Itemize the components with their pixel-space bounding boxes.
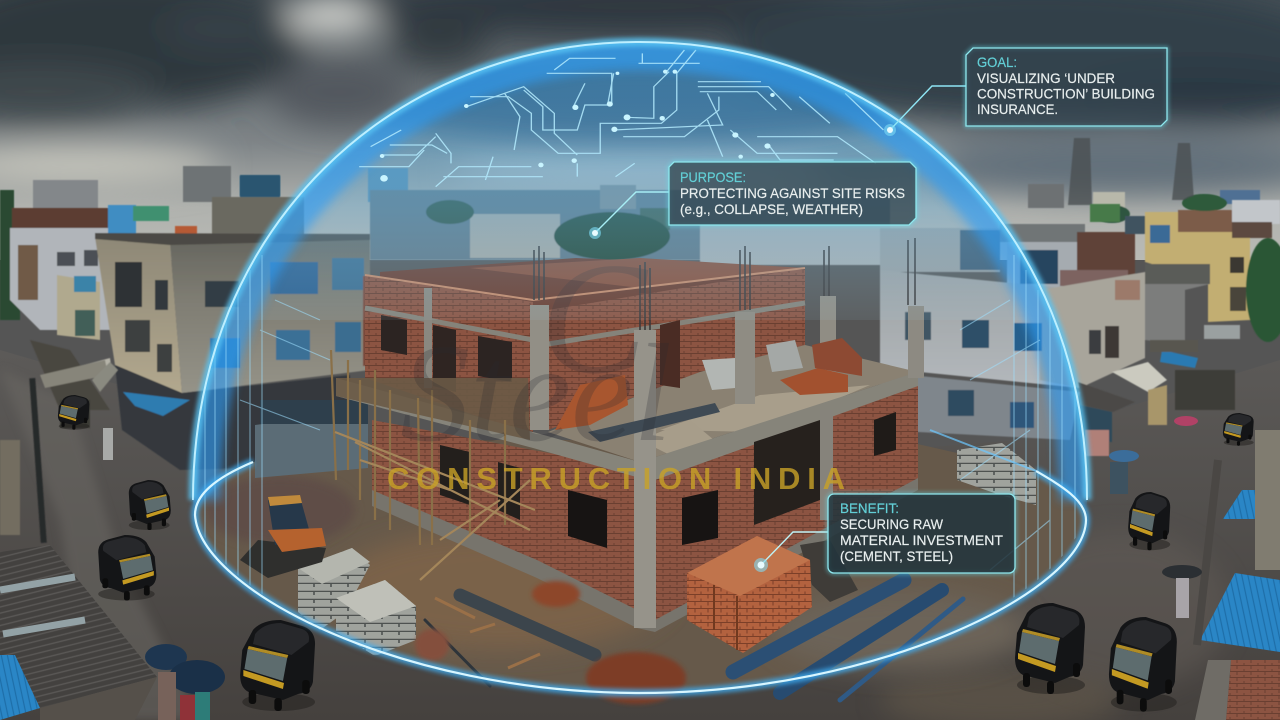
- dark stacked timber by bricks: [800, 540, 858, 602]
- bright wall near rim: [193, 42, 1087, 500]
- site materials: [240, 443, 1036, 704]
- goal text: CONSTRUCTION’ BUILDING: [977, 86, 1155, 102]
- scaffolding boards: [336, 378, 530, 440]
- protective glass dome: [193, 40, 1087, 693]
- windows under the dome: [270, 262, 318, 294]
- foundation plinth: [372, 478, 918, 632]
- terrace slab: [548, 345, 918, 462]
- pedestrians: [180, 695, 195, 720]
- leader line: benefit: [761, 532, 828, 565]
- purpose panel: [669, 162, 916, 225]
- goal panel: [966, 48, 1167, 126]
- utility pole right: [1197, 460, 1218, 645]
- grey right face of corner block: [170, 238, 370, 393]
- rebar spikes: [534, 238, 915, 330]
- benefit panel: [828, 494, 1015, 573]
- dome base ring: [195, 462, 1086, 693]
- stacked orange bricks: [687, 536, 812, 653]
- trees at right edge: [1246, 238, 1280, 342]
- upper storey right brick face: [548, 268, 805, 430]
- benefit text: MATERIAL INVESTMENT: [840, 532, 1003, 548]
- left street buildings: [0, 175, 373, 543]
- purpose text: PURPOSE:: [680, 169, 746, 185]
- cloud band seen through dome: [399, 63, 880, 158]
- benefit text: (CEMENT, STEEL): [840, 548, 953, 564]
- upper storey left brick face: [365, 275, 533, 435]
- benefit text: BENEFIT:: [840, 500, 899, 516]
- excavator: [240, 495, 326, 578]
- purpose text: PROTECTING AGAINST SITE RISKS: [680, 185, 905, 201]
- purpose panel glow: [669, 162, 916, 225]
- blue roof right: [1200, 573, 1280, 652]
- callout: purpose: [589, 162, 916, 239]
- watermark: script lettering: C: [540, 229, 649, 407]
- utility pole: [29, 378, 47, 543]
- callout: goal: [884, 48, 1167, 136]
- corrugated roof: [0, 545, 157, 720]
- anchor dot: benefit: [754, 558, 768, 572]
- watermark: script lettering: Steel: [400, 316, 672, 471]
- red soil pile: [586, 652, 686, 704]
- white main building upper: [880, 270, 1080, 388]
- sky background with storm clouds: [0, 0, 1280, 260]
- right street buildings: [880, 195, 1280, 456]
- purpose text: (e.g., COLLAPSE, WEATHER): [680, 201, 863, 217]
- front left cement bags: [298, 548, 370, 630]
- purpose text: [680, 169, 905, 217]
- window openings: [381, 315, 407, 355]
- steel rebar bundles: [425, 580, 963, 700]
- callout: benefit: [754, 494, 1015, 573]
- leader line: goal: [890, 86, 966, 130]
- ground and roads: [0, 350, 1280, 720]
- right cement bag stack: [957, 443, 1036, 505]
- benefit text: SECURING RAW: [840, 516, 944, 532]
- goal text: GOAL:: [977, 54, 1017, 70]
- benefit panel glow: [828, 494, 1015, 573]
- anchor dot: purpose: [589, 227, 601, 239]
- dome rim glow: [193, 42, 1087, 500]
- terrace materials: [555, 375, 628, 430]
- white main building lower: [880, 372, 1080, 440]
- goal text: VISUALIZING ‘UNDER: [977, 70, 1115, 86]
- back walls of upper storey: [380, 258, 805, 360]
- telecom towers: [1068, 138, 1092, 205]
- goal text: INSURANCE.: [977, 101, 1058, 117]
- tan left face of corner block: [95, 237, 182, 393]
- grey mid building: [1145, 265, 1210, 345]
- blue corrugated roof: [0, 655, 40, 720]
- concrete columns: [530, 305, 549, 430]
- goal panel glow: [966, 48, 1167, 126]
- shops and awnings: [1078, 382, 1135, 412]
- yellow building: [1145, 212, 1250, 322]
- scaffolding poles: [331, 350, 505, 545]
- lower storey left brick face: [372, 420, 640, 615]
- anchor dot: goal: [884, 124, 896, 136]
- ground floor shops: [115, 365, 350, 470]
- circuit nodes: [380, 70, 775, 182]
- distant skyline: [33, 138, 1260, 265]
- slab edge: [336, 372, 918, 480]
- circuit traces: [359, 50, 883, 187]
- building under construction: [331, 238, 924, 632]
- umbrellas: [145, 644, 187, 670]
- watermark: CONSTRUCTION INDIA: CONSTRUCTION INDIA: [387, 461, 845, 496]
- front centre cement bags: [336, 580, 416, 656]
- watermark: script lettering: [400, 229, 672, 471]
- timber offcuts: [435, 598, 540, 668]
- lower storey right brick face: [655, 385, 918, 622]
- perimeter fence: [255, 410, 368, 478]
- foreground roofs and street edge: [0, 416, 1280, 720]
- foreground rickshaws: [58, 395, 1254, 712]
- goal text: [977, 54, 1155, 117]
- leader line: purpose: [595, 192, 669, 233]
- benefit text: [840, 500, 1003, 564]
- construction site ground: [195, 400, 1086, 693]
- vertical light streaks: [205, 255, 1075, 620]
- dome sky tint: [251, 44, 1030, 320]
